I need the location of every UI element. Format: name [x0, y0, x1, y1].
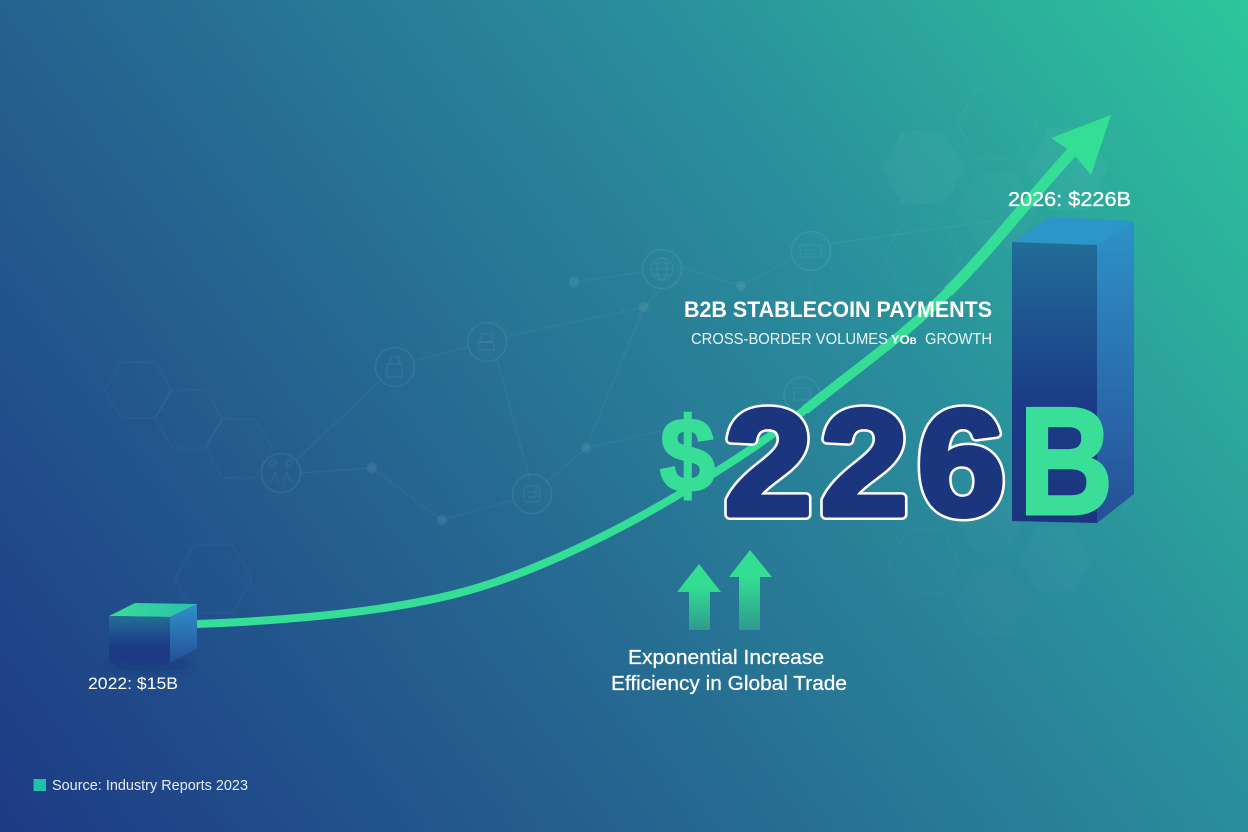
- growth curve with arrow: [197, 115, 1111, 624]
- letter B: B: [1019, 376, 1113, 546]
- source note: [34, 778, 248, 794]
- caption line 2: Efficiency in Global Trade: [611, 673, 847, 695]
- curve lower segment: [197, 408, 807, 624]
- curve upper segment: [805, 290, 950, 410]
- hexagon pattern: left cluster: [105, 362, 272, 613]
- digits outline: 2: [820, 379, 908, 547]
- bar front face: [1012, 242, 1097, 523]
- curve top segment: [948, 152, 1072, 292]
- digits outline: [724, 379, 1005, 547]
- twin up arrows: [677, 550, 772, 630]
- heading block: [684, 297, 992, 348]
- icon: globe node: [642, 250, 682, 288]
- icon: document lock node: [376, 348, 414, 386]
- dollar sign: $: [660, 397, 715, 514]
- network node icons: [262, 232, 830, 514]
- digits outline: 2: [724, 379, 812, 547]
- hexagon pattern: upper right cluster: [881, 88, 1108, 290]
- icon: hidden node behind figure: [784, 377, 820, 413]
- icon: people node: [262, 454, 300, 492]
- caption block: [611, 647, 847, 695]
- digits 226: 2: [820, 379, 908, 547]
- cube front face: [109, 616, 170, 663]
- blockchain network lines: [296, 220, 1000, 520]
- network dots: [367, 277, 746, 525]
- bar side face: [1097, 221, 1134, 523]
- cube top face: [109, 603, 197, 617]
- subheading: cross-border volumes growth: B: [910, 336, 917, 347]
- source text: Source: Industry Reports 2023: [52, 778, 248, 794]
- caption line 1: Exponential Increase: [628, 647, 824, 669]
- large 3D bar: 2026: [1012, 217, 1134, 523]
- label: 2026 value: 2026: $226B: [1008, 189, 1131, 211]
- bar top face: [1012, 217, 1134, 245]
- subheading: cross-border volumes growth: GROWTH: [925, 331, 992, 348]
- headline figure: $226B: [660, 376, 1113, 547]
- arrow head: [1051, 115, 1111, 175]
- arrow: right: [729, 550, 772, 630]
- subheading: cross-border volumes growth: YO: [891, 332, 910, 347]
- icon: card node: [792, 232, 830, 270]
- heading: B2B stablecoin payments: B2B STABLECOIN PAYMENTS: [684, 297, 992, 322]
- digits 226: 2: [724, 379, 812, 547]
- subheading: cross-border volumes growth: CROSS-BORDER VOLUMES: [691, 331, 888, 348]
- source legend square: [34, 779, 46, 791]
- digits 226: [724, 379, 1005, 547]
- arrow: left: [677, 564, 721, 630]
- icon: chip node: [512, 474, 552, 514]
- cube side face: [170, 604, 197, 663]
- digits outline: 6: [918, 379, 1005, 547]
- icon: computer node: [468, 322, 506, 362]
- digits 226: 6: [918, 379, 1005, 547]
- cube shadow: [108, 659, 192, 669]
- small 3D cube: 2022: [108, 603, 197, 669]
- label: 2022 value: 2022: $15B: [88, 674, 178, 693]
- hexagon pattern: lower right cluster: [888, 480, 1092, 637]
